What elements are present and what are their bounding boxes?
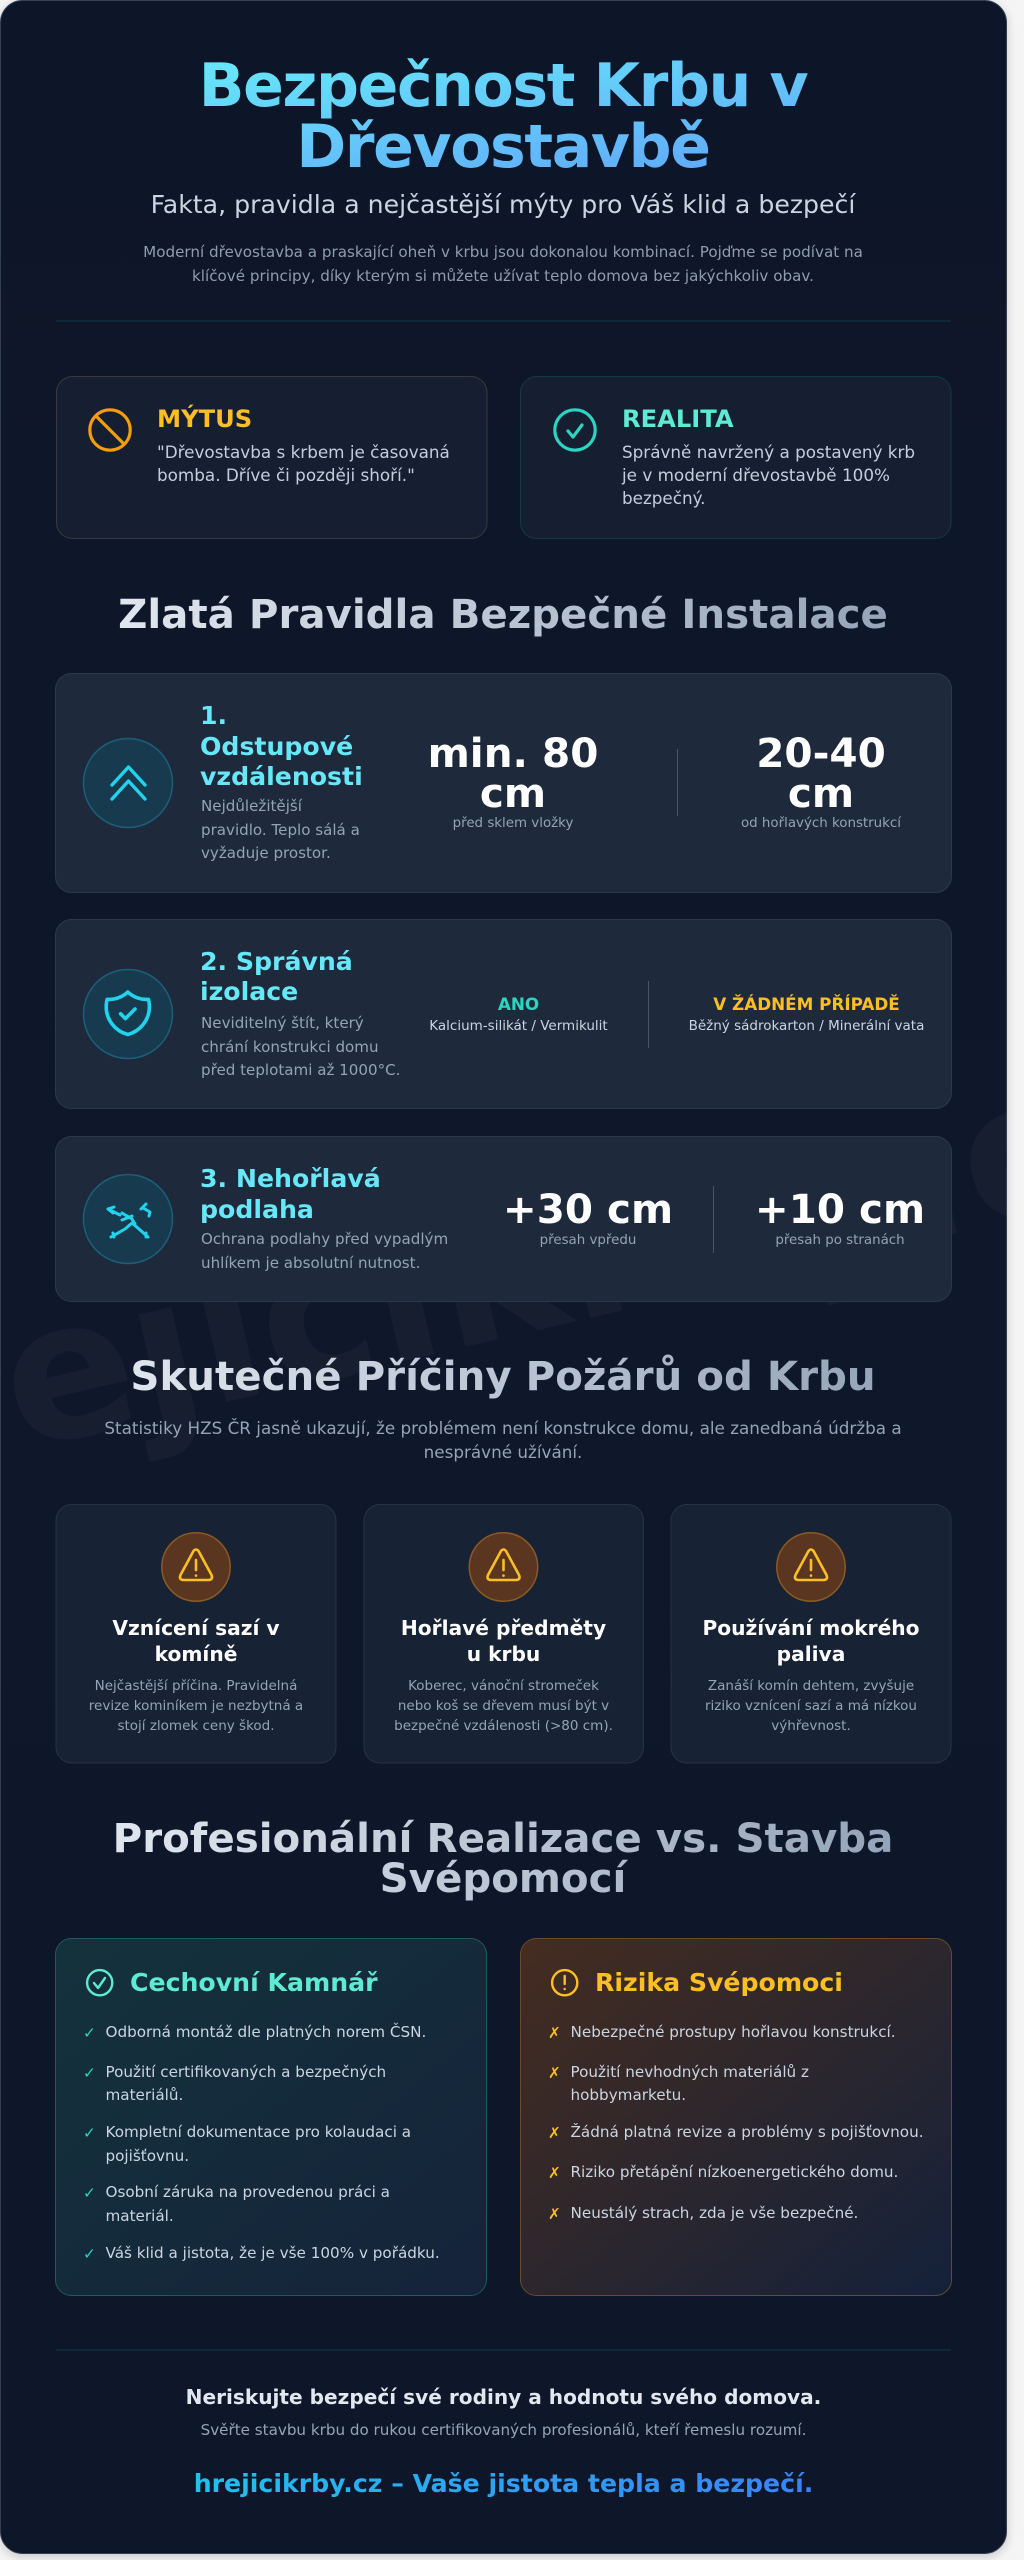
icon: warning [469,1533,538,1601]
professional list: Kompletní dokumentace pro kolaudaci a [106,2123,411,2141]
risks list: ✗ [548,2024,561,2042]
risks list [548,2023,924,2223]
professional list: Odborná montáž dle platných norem ČSN. [106,2022,426,2041]
professional list: materiálů. [106,2086,183,2104]
cause 2 text: Koberec, vánoční stromeček [408,1678,599,1694]
rule 1 text: vyžaduje prostor. [201,844,331,862]
icon: warning [777,1533,845,1601]
forbidden materials: Běžný sádrokarton / Minerální vata [689,1018,924,1034]
stat: 20-40 cm: cm [788,769,854,817]
rule 1 text: Nejdůležitější [201,797,303,815]
myth heading: MÝTUS [157,403,252,433]
panel: reality [520,376,951,538]
rule 3 heading: podlaha [200,1195,314,1224]
allowed materials: Kalcium-silikát / Vermikulit [429,1018,608,1034]
professional list: ✓ [83,2245,96,2263]
cause 3 heading: Používání mokrého [702,1616,920,1640]
professional list: ✓ [83,2024,96,2042]
cause 3 text: výhřevnost. [771,1718,851,1734]
reality text: bezpečný. [622,488,706,508]
cause 2 heading: u krbu [467,1642,540,1666]
risks list: ✗ [548,2205,561,2223]
cause 3 text: riziko vznícení sazí a má nízkou [705,1698,917,1714]
intro text: klíčové principy, díky kterým si můžete užívat teplo domova bez jakýchkoliv obav. [192,267,814,285]
rule 3 text: uhlíkem je absolutní nutnost. [201,1254,420,1272]
title: Bezpečnost Krbu v [199,51,809,121]
icon: floor [84,1174,172,1264]
cause 3 text: Zanáší komín dehtem, zvyšuje [708,1678,914,1694]
cause 3 heading: paliva [777,1642,845,1666]
risks list: ✗ [548,2164,561,2182]
forbidden materials: V ŽÁDNÉM PŘÍPADĚ [713,993,900,1014]
risks heading: Rizika Svépomoci [595,1968,843,1997]
stat: min 80 cm [428,729,598,831]
reality heading: REALITA [622,405,734,433]
rule 1 heading: 1. [200,701,227,730]
stat: 20-40 cm [741,729,902,831]
stat: +30 cm: přesah vpředu [540,1232,636,1248]
panel: rule 2 [56,920,952,1108]
subtitle: Fakta, pravidla a nejčastější mýty pro Váš klid a bezpečí [151,190,856,219]
icon: shield [84,970,172,1058]
professional list: ✓ [83,2064,96,2082]
icon: alert circle [552,1970,577,1995]
risks list: ✗ [548,2124,561,2142]
icon: prohibited [90,410,130,450]
brand line: hrejicikrby.cz – Vaše jistota tepla a bezpečí. [194,2469,813,2498]
myth text: bomba. Dříve či později shoří." [157,465,415,485]
icon: check circle [555,410,595,450]
stat: +10 cm: přesah po stranách [775,1232,905,1248]
professional list: Použití certifikovaných a bezpečných [106,2063,386,2081]
stat: +10 cm: +10 cm [755,1185,925,1233]
icon: check badge [87,1970,112,1995]
panel: professional [56,1938,486,2296]
myth text: "Dřevostavba s krbem je časovaná [157,442,450,462]
cause 2 text: nebo koš se dřevem musí být v [398,1698,609,1714]
allowed materials [429,994,608,1034]
panel: cause 1 [56,1504,336,1763]
panel: myth [56,376,487,538]
cause 1 heading: komíně [155,1642,237,1666]
risks list: Neustálý strach, zda je vše bezpečné. [570,2204,858,2222]
stat: min 80 cm: min. 80 [428,729,598,777]
risks list: Použití nevhodných materiálů z [570,2063,809,2081]
risks list: hobbymarketu. [570,2086,686,2104]
panel: DIY risks [520,1938,952,2296]
panel: cause 3 [671,1504,951,1763]
stat: 20-40 cm: od hořlavých konstrukcí [741,815,902,831]
rule 2 text: chrání konstrukci domu [201,1038,379,1056]
reality text: je v moderní dřevostavbě 100% [621,465,890,485]
stat: min 80 cm: před sklem vložky [453,815,573,831]
rule 3 heading: 3. Nehořlavá [200,1164,381,1193]
cause 1 text: revize kominíkem je nezbytná a [89,1698,303,1714]
rule 1 heading: vzdálenosti [200,762,363,791]
stat: min 80 cm: cm [480,769,546,817]
panel: rule 3 [56,1136,952,1302]
cause 1 text: Nejčastější příčina. Pravidelná [95,1678,297,1694]
footer text: Svěřte stavbu krbu do rukou certifikovaných profesionálů, kteří řemeslu rozumí. [201,2421,806,2439]
professional list: ✓ [83,2124,96,2142]
intro text: Moderní dřevostavba a praskající oheň v krbu jsou dokonalou kombinací. Pojďme se podívat na [143,243,863,261]
cause 1 text: stojí zlomek ceny škod. [117,1718,275,1734]
cause 2 text: bezpečné vzdálenosti (>80 cm). [394,1718,613,1734]
panel: rule 1 [56,674,952,892]
risks list: Nebezpečné prostupy hořlavou konstrukcí. [570,2023,896,2041]
heading: professional vs DIY: Svépomocí [380,1855,629,1902]
heading: real causes: Skutečné Příčiny Požárů od Krbu [130,1353,876,1400]
header [143,51,863,285]
title: Dřevostavbě [296,112,710,182]
causes intro: Statistiky HZS ČR jasně ukazují, že problémem není konstrukce domu, ale zanedbaná údržba a [104,1417,902,1438]
causes intro: nesprávné užívání. [424,1442,582,1462]
rule 2 heading: 2. Správná [200,947,353,976]
rule 2 heading: izolace [200,977,298,1006]
heading: golden rules: Zlatá Pravidla Bezpečné Instalace [118,591,888,638]
forbidden materials [689,993,924,1034]
risks list: ✗ [548,2064,561,2082]
footer [186,2385,821,2498]
risks list: Riziko přetápění nízkoenergetického domu. [570,2163,898,2181]
professional list: materiál. [106,2207,174,2225]
cause 2 heading: Hořlavé předměty [401,1616,606,1640]
footer headline: Neriskujte bezpečí své rodiny a hodnotu svého domova. [186,2385,821,2409]
panel: cause 2 [364,1504,644,1763]
icon: double chevron [84,738,172,828]
rule 2 text: před teplotami až 1000°C. [201,1061,400,1079]
professional list [83,2022,440,2263]
professional list: pojišťovnu. [106,2147,189,2165]
cause 1 heading: Vznícení sazí v [112,1616,280,1640]
professional list: Osobní záruka na provedenou práci a [106,2183,390,2201]
icon: warning [162,1533,230,1601]
stat: 20-40 cm: 20-40 [756,729,886,777]
rule 1 heading: Odstupové [200,732,353,761]
allowed materials: ANO [498,994,539,1014]
rule 2 text: Neviditelný štít, který [201,1014,364,1032]
reality text: Správně navržený a postavený krb [622,442,915,462]
risks list: Žádná platná revize a problémy s pojišťovnou. [570,2122,924,2141]
rule 1 text: pravidlo. Teplo sálá a [201,821,360,839]
rule 3 text: Ochrana podlahy před vypadlým [201,1230,448,1248]
heading: professional vs DIY: Profesionální Realizace vs. Stavba [113,1815,893,1862]
stat: +30 cm: +30 cm [503,1185,673,1233]
professional list: Váš klid a jistota, že je vše 100% v pořádku. [106,2244,440,2262]
professional list: ✓ [83,2184,96,2202]
professional heading: Cechovní Kamnář [130,1968,378,1997]
